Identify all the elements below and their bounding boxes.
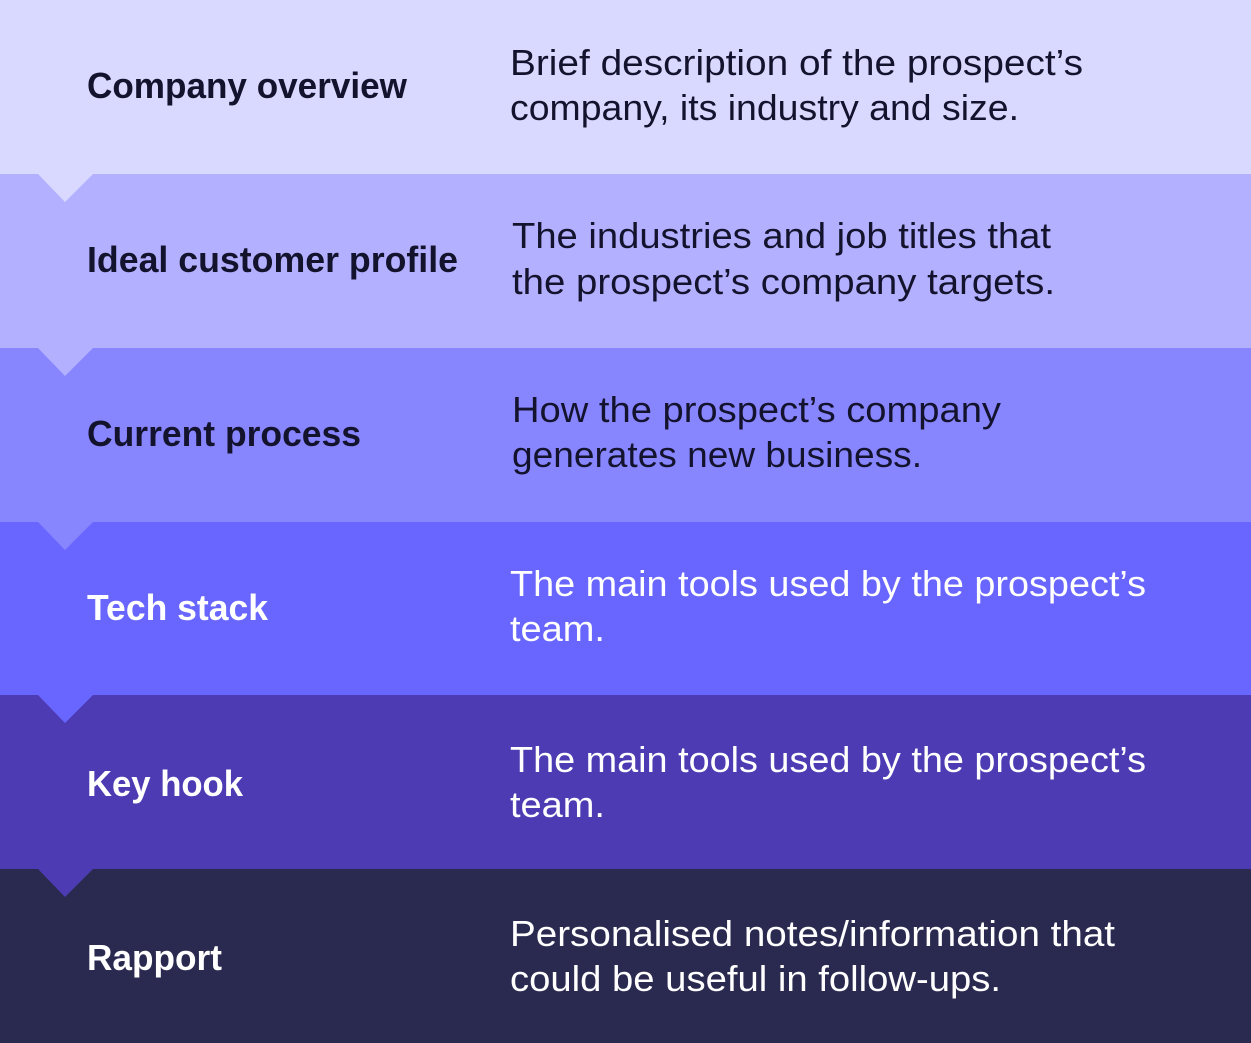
- text: company overview description: Brief description of the prospect’s: [510, 42, 1083, 83]
- text: tech stack description: team.: [510, 608, 605, 649]
- text: key hook description: The main tools used by the prospect’s: [510, 739, 1146, 780]
- text: key hook description: [510, 739, 1146, 825]
- text: company overview description: company, its industry and size.: [510, 87, 1019, 128]
- text: current process description: How the prospect’s company: [512, 389, 1001, 430]
- text: rapport description: could be useful in follow-ups.: [510, 958, 1001, 999]
- text: tech stack description: [510, 563, 1146, 649]
- panel: tech stack: [0, 522, 1251, 695]
- heading: ideal customer profile: Ideal customer profile: [87, 239, 458, 280]
- heading: current process: Current process: [87, 413, 361, 454]
- heading: company overview: Company overview: [87, 65, 408, 106]
- panel: company overview: [0, 0, 1251, 174]
- panel: ideal customer profile: [0, 174, 1251, 348]
- text: ideal customer profile description: [512, 215, 1055, 302]
- heading: rapport: Rapport: [87, 937, 222, 978]
- arrow: ideal customer profile to current process: [38, 348, 93, 376]
- panel: current process: [0, 348, 1251, 522]
- text: rapport description: [510, 913, 1115, 999]
- text: tech stack description: The main tools used by the prospect’s: [510, 563, 1146, 604]
- text: rapport description: Personalised notes/information that: [510, 913, 1115, 954]
- arrow: company overview to ideal customer profile: [38, 174, 93, 202]
- text: company overview description: [510, 42, 1083, 128]
- heading: tech stack: Tech stack: [87, 587, 269, 628]
- text: current process description: generates new business.: [512, 434, 922, 475]
- arrow: tech stack to key hook: [38, 695, 93, 723]
- text: ideal customer profile description: The industries and job titles that: [512, 215, 1051, 256]
- arrow: current process to tech stack: [38, 522, 93, 550]
- heading: key hook: Key hook: [87, 763, 244, 804]
- text: current process description: [512, 389, 1001, 475]
- panel: rapport: [0, 869, 1251, 1043]
- panel: key hook: [0, 695, 1251, 869]
- arrow: key hook to rapport: [38, 869, 93, 897]
- text: key hook description: team.: [510, 784, 605, 825]
- text: ideal customer profile description: the prospect’s company targets.: [512, 261, 1055, 302]
